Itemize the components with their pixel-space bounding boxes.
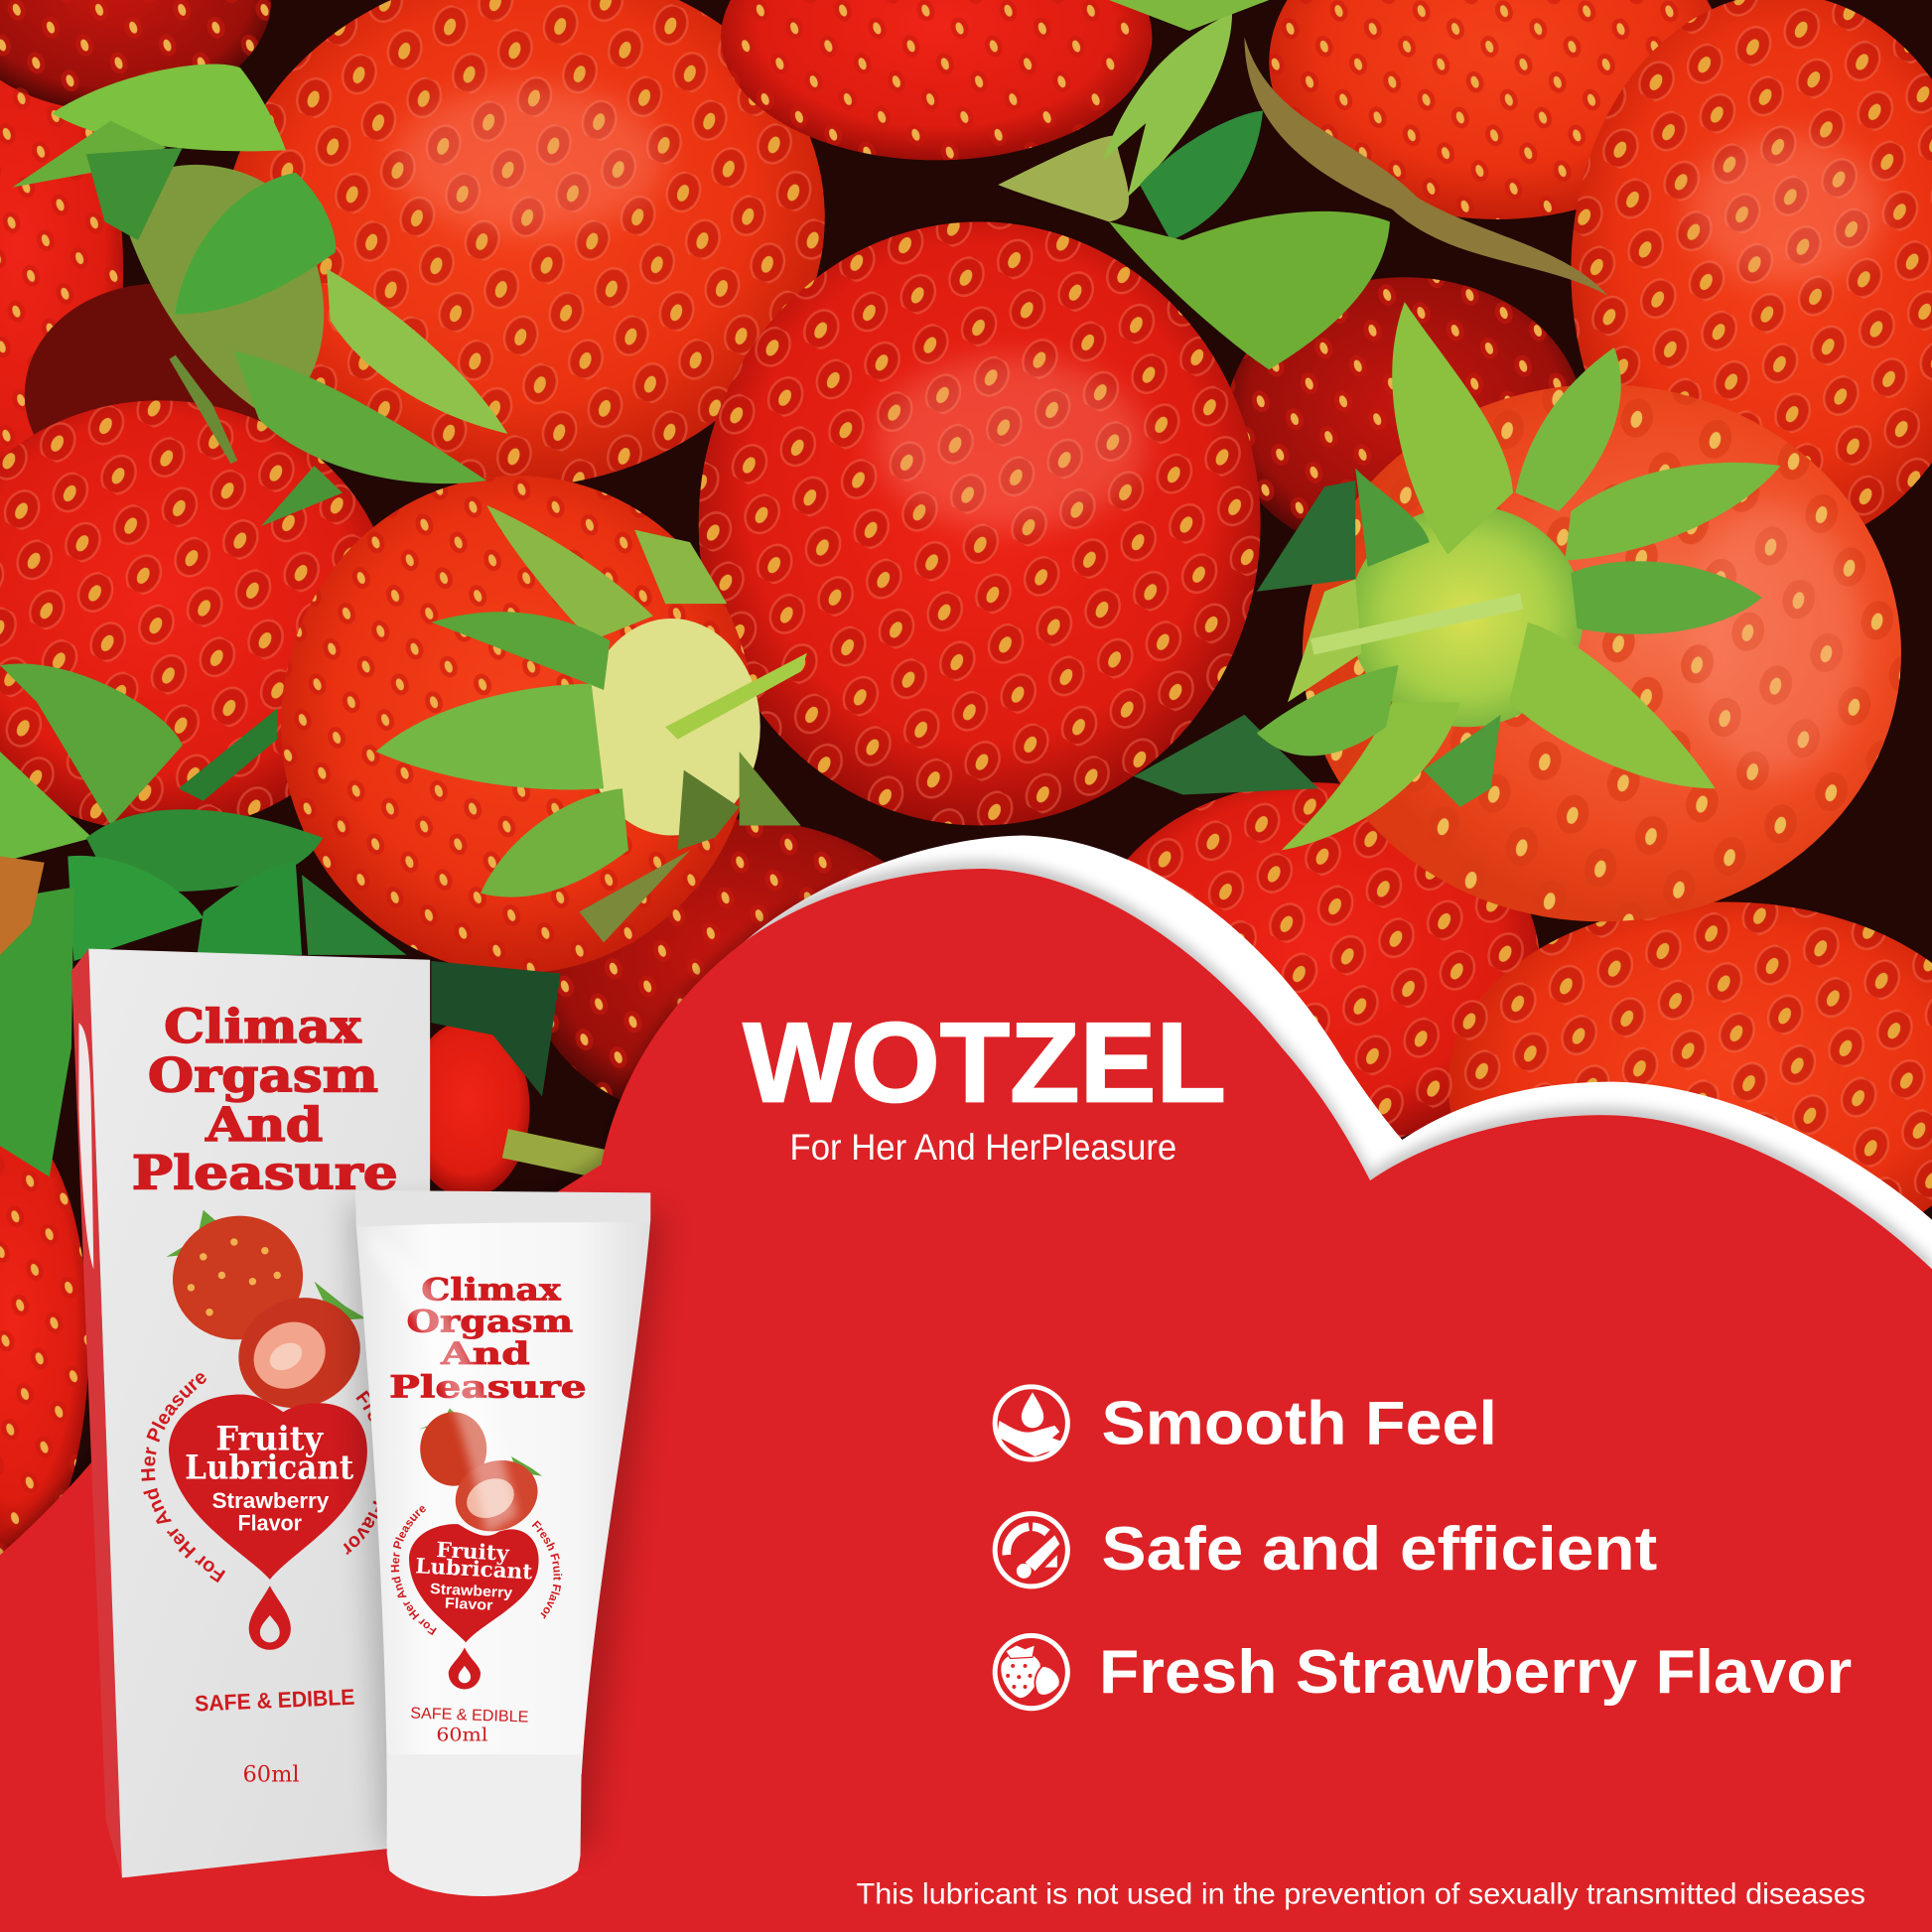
tube highlight bbox=[369, 1232, 517, 1534]
product tube bbox=[355, 1190, 651, 1896]
product box bbox=[71, 949, 431, 1878]
strawberry: top right bbox=[1269, 0, 1725, 219]
tube curved text: Fresh Fruit Flavor bbox=[532, 1520, 562, 1619]
tube heart text: Lubricant bbox=[415, 1553, 533, 1584]
calyx: centre stem leaves bbox=[998, 0, 1608, 369]
strawberry: dark filler left bbox=[25, 283, 296, 505]
brand name: WOTZEL: WOTZEL bbox=[743, 1001, 1226, 1127]
calyx: top left berry bbox=[12, 64, 507, 526]
tagline: For Her And HerPleasure bbox=[790, 1126, 1176, 1168]
strawberry: top left corner bbox=[0, 0, 271, 111]
box safe and edible: SAFE & EDIBLE bbox=[195, 1685, 355, 1717]
label: Safe and efficient bbox=[1102, 1515, 1657, 1584]
strawberry: centre large bbox=[699, 221, 1261, 826]
box drop icon bbox=[249, 1586, 291, 1650]
tube heart text: Flavor bbox=[445, 1595, 493, 1614]
strawberry: dark lower centre bbox=[530, 819, 949, 1128]
box title: Orgasm bbox=[148, 1049, 378, 1104]
strawberry: top left large bbox=[189, 0, 859, 526]
glossy highlights bbox=[394, 86, 1885, 776]
strawberry: far left top bbox=[0, 31, 123, 511]
strawberry: right with calyx bbox=[1303, 384, 1901, 921]
red panel bbox=[0, 869, 1932, 1932]
strawberry: left with calyx bbox=[281, 476, 755, 973]
calyx: right berry bbox=[1134, 302, 1780, 850]
tube title: And bbox=[440, 1336, 530, 1372]
tube curved text: For Her And Her Pleasure bbox=[391, 1506, 437, 1636]
box heart badge bbox=[169, 1395, 367, 1580]
tube heart text: Fruity bbox=[436, 1537, 510, 1566]
feature: fresh strawberry flavor bbox=[995, 1636, 1852, 1709]
box heart text: Strawberry bbox=[211, 1488, 330, 1513]
box heart text: Lubricant bbox=[185, 1448, 354, 1486]
feature: safe and efficient bbox=[995, 1514, 1657, 1587]
strawberry: far right bbox=[1571, 0, 1932, 548]
strawberry: small behind box bbox=[407, 1021, 530, 1197]
strawberry: lower right middle bbox=[1084, 782, 1540, 1152]
tube cap bbox=[387, 1754, 582, 1896]
box strawberry illustration bbox=[159, 1201, 376, 1425]
strawberry: dark behind right calyx bbox=[1226, 277, 1584, 561]
leaves: lower left cluster bbox=[0, 664, 604, 1176]
box curved text bbox=[141, 1373, 377, 1583]
strawberry: lower far left bbox=[0, 1128, 88, 1559]
box title: Pleasure bbox=[132, 1147, 398, 1201]
tube title: Pleasure bbox=[389, 1369, 587, 1405]
label: Fresh Strawberry Flavor bbox=[1099, 1638, 1852, 1707]
tube strawberry illustration bbox=[419, 1409, 548, 1543]
box heart text: Flavor bbox=[238, 1510, 302, 1535]
strawberry: left middle bbox=[0, 400, 394, 832]
tube heart badge bbox=[409, 1524, 539, 1642]
tube drop icon bbox=[449, 1647, 481, 1690]
box volume: 60ml bbox=[242, 1762, 300, 1788]
box title: Climax bbox=[164, 1000, 362, 1054]
disclaimer: This lubricant is not used in the prevention of sexually transmitted diseases bbox=[857, 1877, 1865, 1910]
strawberry: bottom right bbox=[1448, 901, 1932, 1267]
box curved text: Fresh Fruit Flavor bbox=[344, 1390, 377, 1555]
tube body bbox=[356, 1195, 650, 1774]
tube title bbox=[389, 1272, 587, 1405]
strawberry: top centre bbox=[721, 0, 1152, 160]
tube curved text bbox=[391, 1506, 562, 1636]
calyx: left berry bbox=[376, 505, 807, 942]
tube volume: 60ml bbox=[436, 1725, 488, 1746]
tube crimp bbox=[354, 1190, 650, 1227]
box spine bbox=[71, 949, 122, 1877]
box curved text: For Her And Her Pleasure bbox=[141, 1373, 226, 1583]
icon: strawberry bbox=[995, 1636, 1067, 1709]
tube safe and edible: SAFE & EDIBLE bbox=[410, 1704, 529, 1726]
white curved band bbox=[0, 835, 1932, 1932]
label: Smooth Feel bbox=[1102, 1390, 1497, 1458]
box heart text bbox=[185, 1420, 354, 1535]
tube shadow bbox=[347, 1201, 665, 1849]
icon: gauge bbox=[995, 1514, 1067, 1587]
box title: And bbox=[205, 1098, 323, 1153]
tube title: Climax bbox=[421, 1272, 561, 1308]
icon: drop and hand bbox=[995, 1387, 1067, 1459]
box title bbox=[132, 1000, 398, 1201]
feature: smooth feel bbox=[995, 1387, 1497, 1459]
box heart text: Fruity bbox=[215, 1420, 325, 1458]
tube heart text: Strawberry bbox=[430, 1582, 513, 1601]
tube heart text bbox=[415, 1537, 533, 1614]
tube title: Orgasm bbox=[407, 1305, 573, 1340]
box front bbox=[88, 949, 430, 1877]
